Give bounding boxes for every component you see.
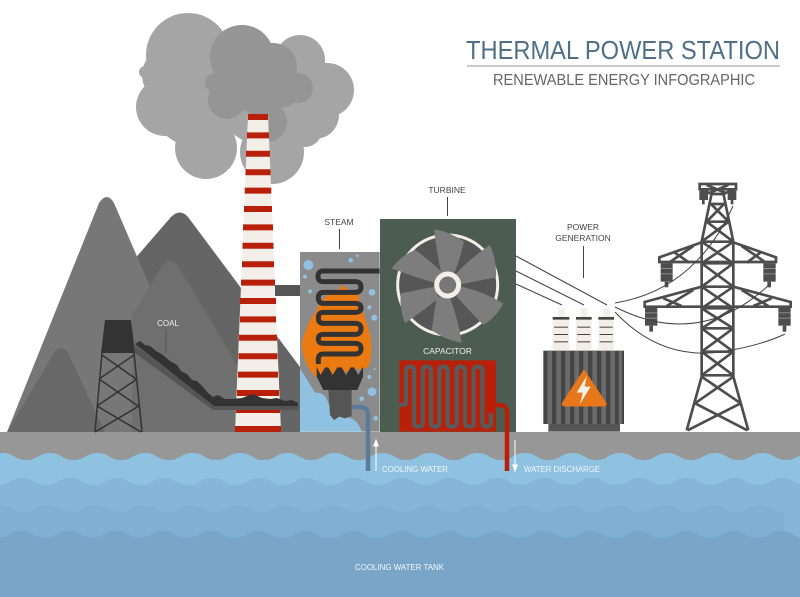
label: power generation: [555, 222, 611, 278]
arrow: cooling water up: [374, 440, 378, 471]
flame: [302, 285, 371, 377]
cooling water pipe: [352, 407, 368, 471]
coal conveyor: [135, 341, 298, 410]
water layers: [0, 453, 800, 597]
wires: transformer to pylon: [615, 206, 785, 353]
label: coal: [157, 319, 179, 353]
label: water discharge: WATER DISCHARGE: [524, 465, 600, 474]
pylon: [645, 184, 791, 430]
mountains: [7, 197, 300, 432]
duct between chimney and boiler: [275, 285, 300, 296]
turbine housing: [380, 219, 516, 432]
burner stem: [328, 390, 352, 420]
transformer: [543, 308, 624, 432]
label: steam: STEAM: [324, 217, 354, 227]
label: power generation: POWER: [567, 222, 599, 232]
ground: [0, 432, 800, 472]
turbine fan: [392, 229, 503, 343]
subtitle: RENEWABLE ENERGY INFOGRAPHIC: [493, 72, 755, 89]
wires: turbine to transformer: [516, 256, 607, 305]
boiler: [300, 252, 380, 432]
capacitor: [399, 360, 496, 432]
smoke cloud: [136, 13, 354, 184]
label: cooling water tank: COOLING WATER TANK: [355, 563, 445, 572]
title rule: [467, 66, 780, 67]
warning triangle: [562, 370, 606, 406]
coal silo tower: [95, 320, 142, 432]
label: cooling water: COOLING WATER: [382, 465, 448, 474]
insulators: [553, 308, 614, 350]
burner: [317, 367, 363, 390]
label: steam: [324, 217, 354, 249]
chimney: [235, 114, 281, 432]
label: power generation: GENERATION: [555, 233, 611, 243]
label: turbine: [428, 185, 466, 216]
label: coal: COAL: [157, 319, 179, 328]
boiler water vapour: [300, 368, 362, 432]
discharge pipe: [491, 405, 507, 471]
arrow: discharge down: [513, 440, 517, 471]
bubbles: [303, 254, 378, 421]
heating coil: [318, 271, 380, 364]
label: turbine: TURBINE: [428, 185, 466, 195]
label: capacitor: CAPACITOR: [423, 346, 472, 356]
